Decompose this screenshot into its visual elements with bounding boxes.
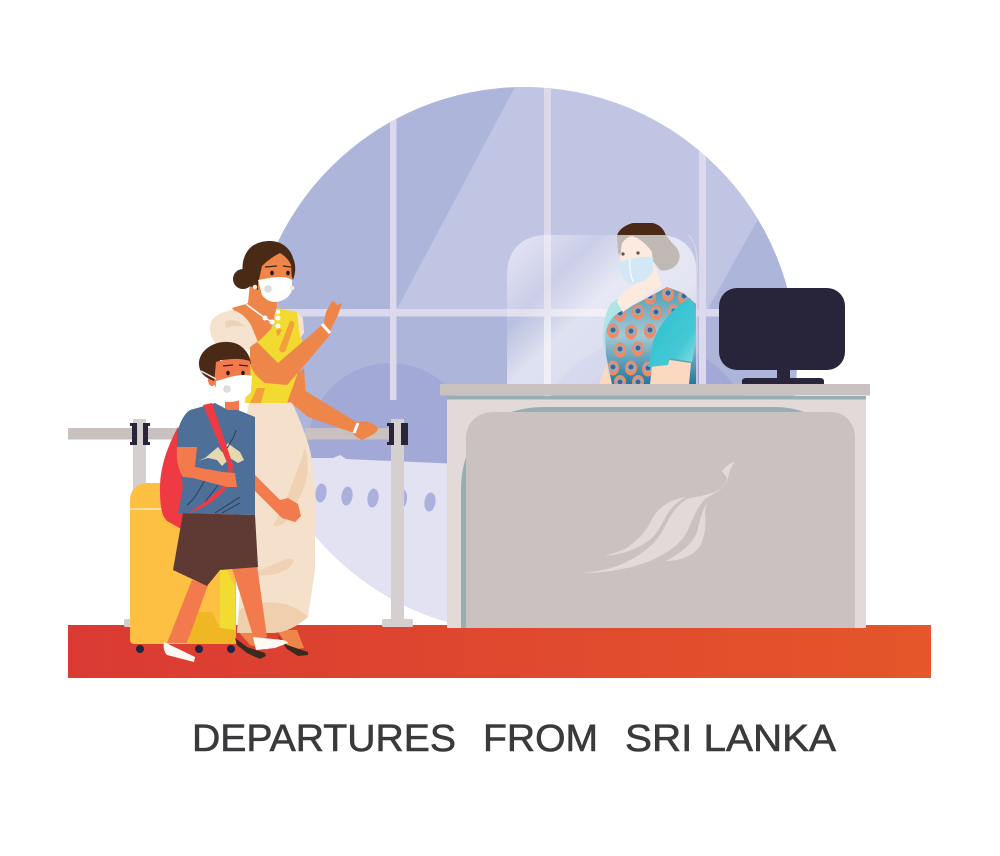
computer monitor (719, 288, 845, 384)
boy mask (216, 375, 252, 402)
t-shirt island print (198, 443, 244, 466)
right stanchion (305, 419, 413, 627)
mother eyes (270, 271, 274, 275)
mother feet (277, 630, 304, 650)
mother hair (242, 241, 295, 290)
boy bag strap (187, 403, 233, 514)
airplane fuselage (312, 455, 447, 622)
mother sari skirt (237, 398, 315, 633)
clerk chest and raised shawl (617, 278, 662, 312)
clerk eyes (621, 252, 625, 256)
clerk patterned sari (605, 287, 696, 384)
plexiglass shield (507, 235, 697, 384)
mother neck and chest (232, 283, 277, 345)
mother bracelet lower (354, 423, 358, 433)
boy far arm (254, 474, 301, 522)
boy figure (160, 342, 301, 662)
light sky panel (397, 80, 762, 316)
clerk left sleeve (603, 295, 633, 360)
suitcase handle line (130, 508, 165, 510)
mother raised arm (250, 325, 330, 385)
mother necklace (246, 304, 274, 323)
suitcase body (130, 483, 236, 644)
window backdrop circle (270, 87, 797, 622)
mother earrings (253, 285, 294, 290)
mother waist (285, 368, 306, 403)
boy blue t-shirt (177, 403, 255, 515)
desk front panel (466, 412, 855, 628)
mother shoes (277, 635, 308, 656)
boy eyebrows (223, 365, 248, 366)
boy shorts (173, 513, 258, 586)
terminal dome right (551, 354, 740, 396)
left stanchion (68, 419, 189, 627)
window mullions (274, 88, 719, 400)
suitcase wheels (136, 645, 235, 653)
caption: DEPARTURES (192, 718, 456, 760)
desk counter top (440, 384, 870, 396)
mother lower hand (353, 421, 378, 440)
mother figure (210, 241, 378, 659)
yellow suitcase (130, 483, 236, 653)
clerk mask (619, 257, 653, 284)
t-shirt wrinkles (187, 430, 240, 513)
clerk face (620, 236, 653, 285)
mother mask (258, 277, 292, 302)
caption: SRI LANKA (625, 718, 837, 760)
desk panel shadow (461, 407, 855, 628)
mother face (258, 253, 292, 300)
mother sleeve puff (210, 310, 258, 350)
boy backpack (160, 427, 190, 530)
airplane windows (314, 483, 437, 512)
boy eyes (226, 371, 230, 375)
clerk hair bun (617, 235, 680, 270)
clerk hair top (617, 223, 666, 236)
mother yellow blouse (245, 308, 302, 403)
clerk left hand (599, 365, 612, 384)
boy shoes (164, 642, 195, 662)
desk teal trim (447, 396, 866, 400)
boy neck (225, 395, 239, 413)
clerk forearm (650, 360, 691, 384)
caption: FROM (483, 718, 598, 760)
mother eyebrows (265, 266, 291, 267)
clerk neck (632, 258, 662, 296)
sari skirt shading (237, 602, 308, 633)
sari peacock pattern (607, 286, 690, 389)
check-in clerk (599, 223, 697, 389)
boy face (214, 359, 251, 398)
mother raised hand (323, 301, 342, 334)
boy ear (208, 374, 216, 386)
clerk right sleeve (648, 298, 696, 367)
desk body (447, 396, 866, 628)
check-in desk (440, 384, 870, 628)
boy legs (167, 580, 208, 643)
suitcase yellow panel (220, 553, 235, 630)
boy hair (199, 342, 251, 381)
mother bracelet raised (322, 324, 330, 333)
boy near arm (177, 447, 237, 487)
terminal dome left (308, 363, 456, 464)
blouse orange accent (279, 321, 294, 353)
caption (192, 718, 837, 760)
shield edge highlight (688, 235, 697, 384)
red carpet (68, 625, 931, 678)
suitcase shadow (189, 612, 236, 644)
mother lower arm (288, 390, 358, 433)
mother hair bun (233, 269, 253, 289)
airline peacock logo (582, 462, 735, 573)
